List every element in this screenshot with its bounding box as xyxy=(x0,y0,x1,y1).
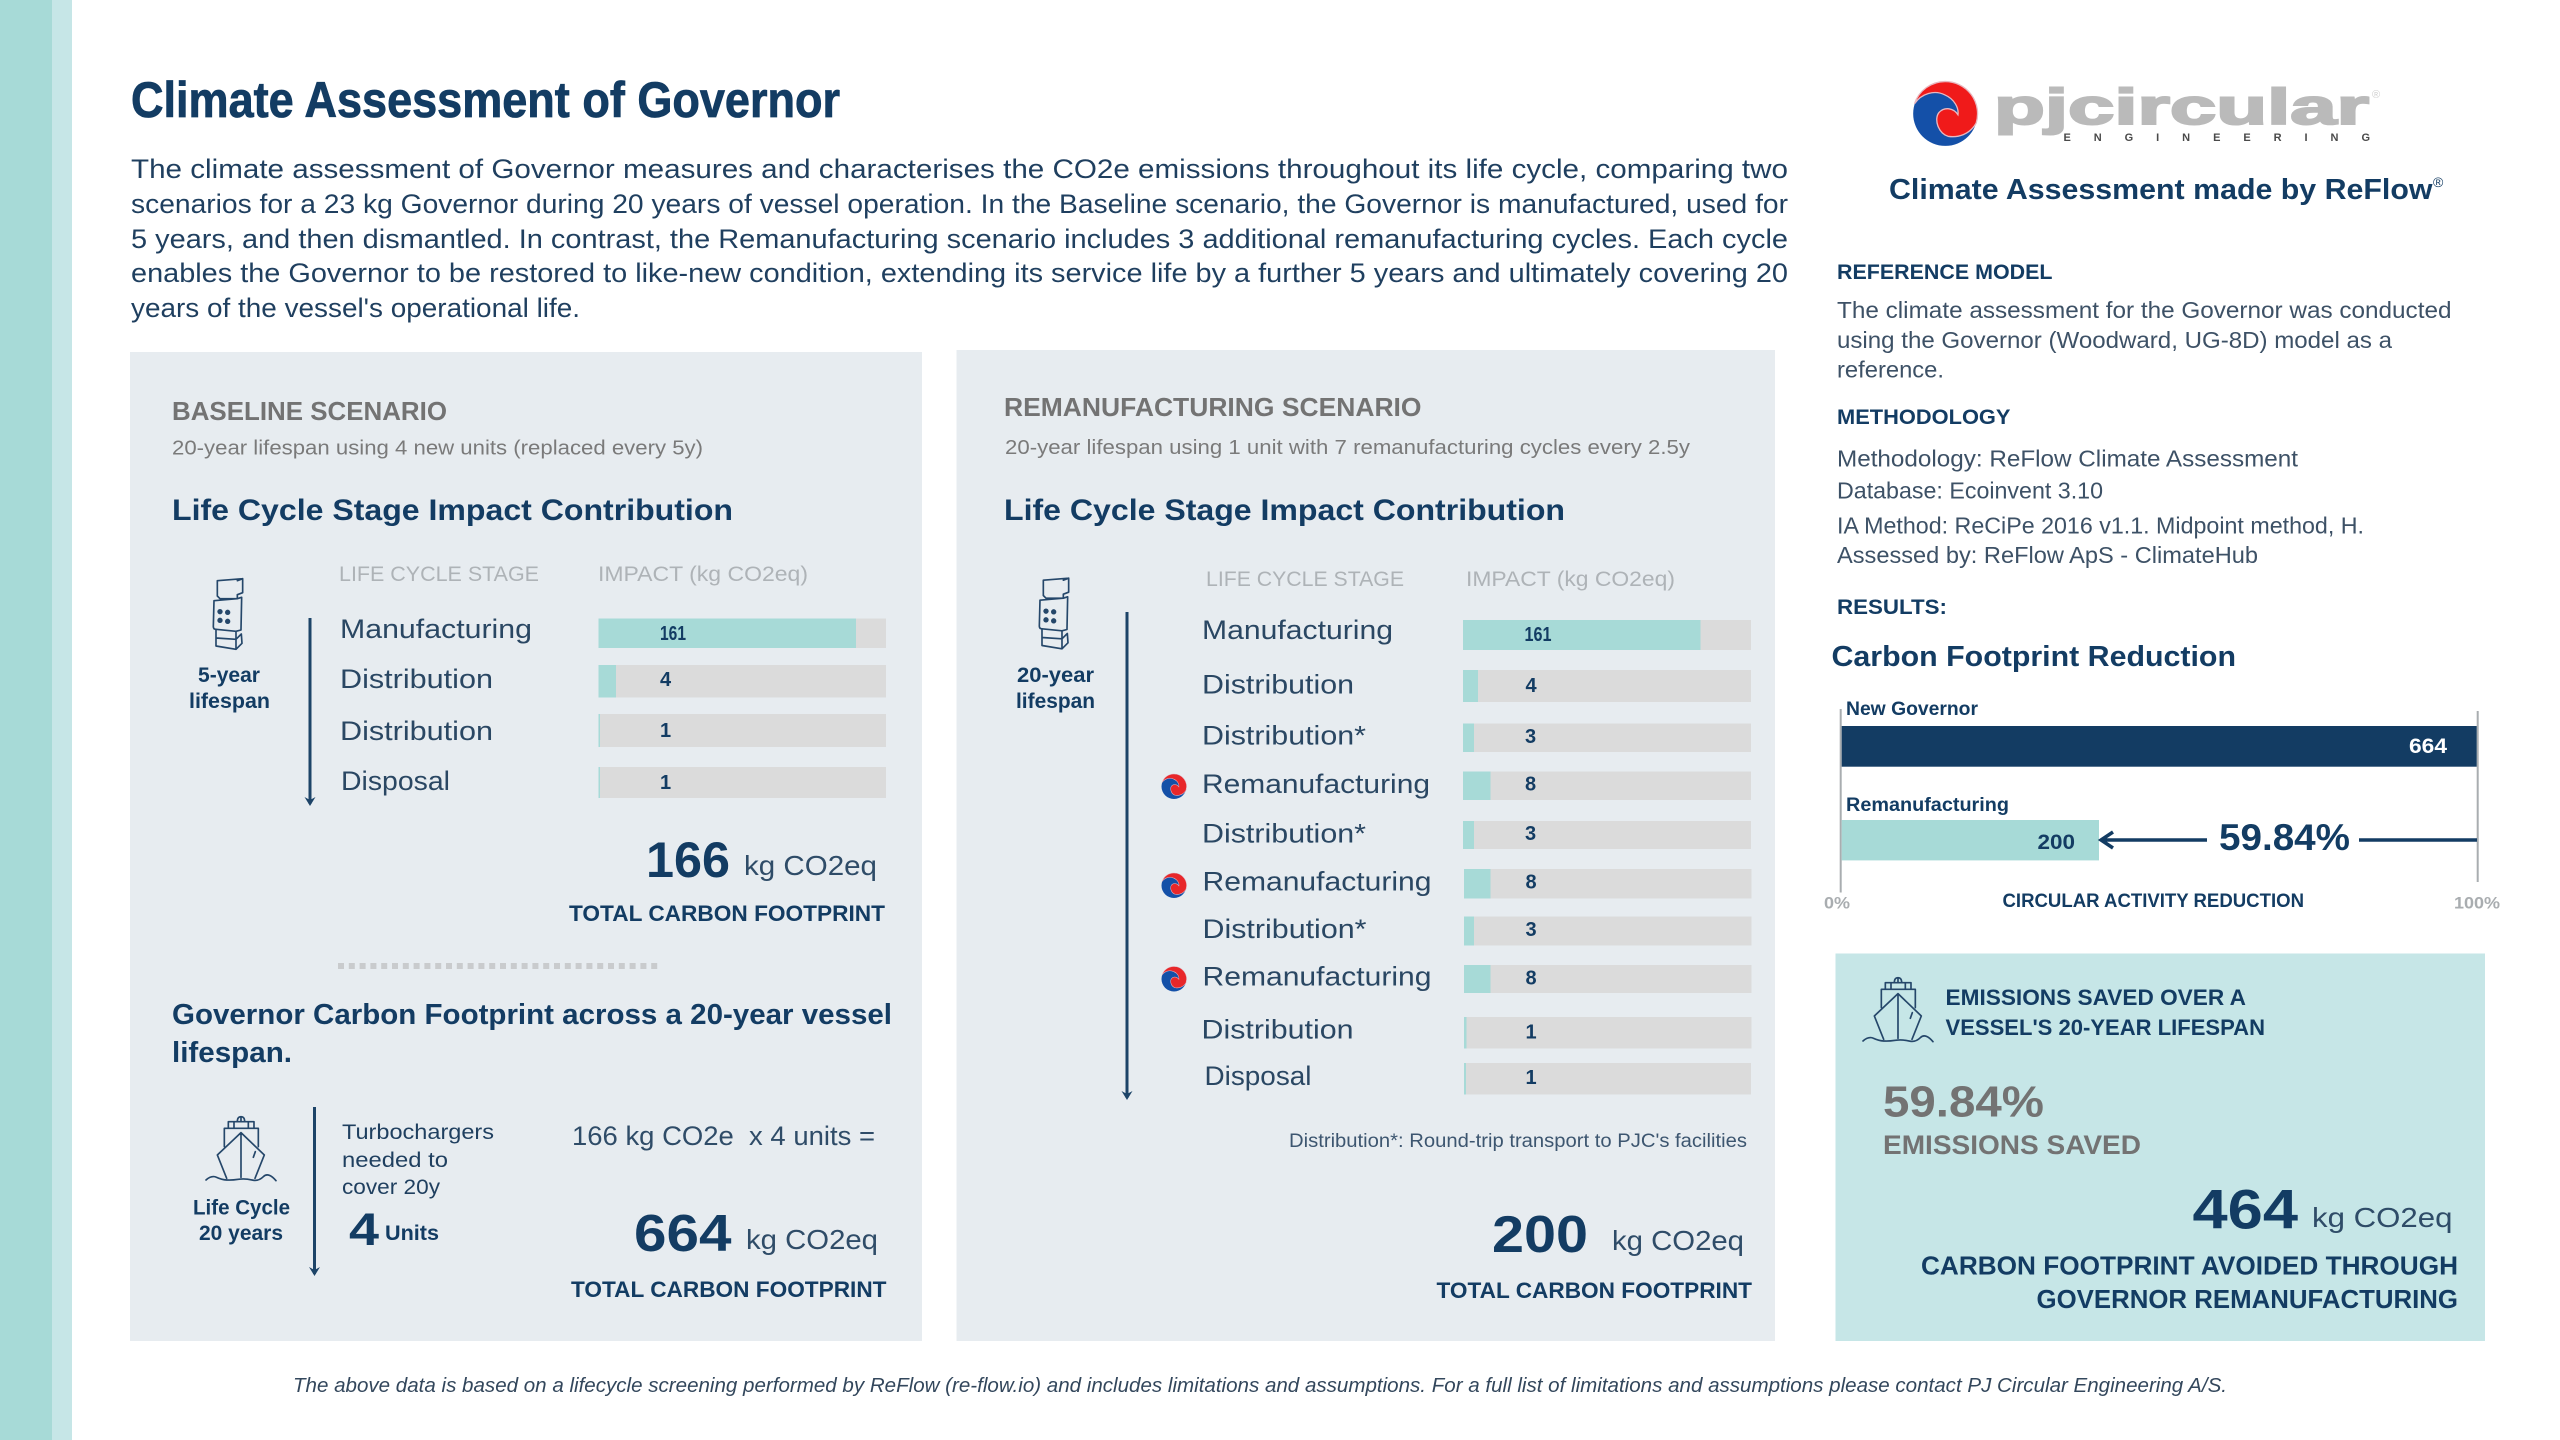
row: distribution 2 xyxy=(340,714,886,747)
bar: remanufacturing xyxy=(1842,820,2099,860)
footer disclaimer: The above data is based on a lifecycle screening performed by ReFlow (re-flow.io) and includes limitations and assumptions. For a full list of limitations and assumptions please contact PJ Circular Engineering A/S. xyxy=(293,1374,2227,1397)
row: distribution star 3: Distribution* xyxy=(1202,914,1366,944)
intro paragraph: enables the Governor to be restored to like-new condition, extending its service life by a further 5 years and ultimately covering 20 xyxy=(131,258,1788,288)
turbochargers text xyxy=(342,1120,494,1199)
panel: baseline scenario xyxy=(130,352,922,1341)
icon: governor xyxy=(213,579,243,649)
20-year total: 664 xyxy=(634,1205,732,1263)
remanufacturing total: kg CO2eq xyxy=(1612,1225,1744,1256)
row: remanufacturing 3: Remanufacturing xyxy=(1202,962,1432,992)
intro paragraph: 5 years, and then dismantled. In contrast, the Remanufacturing scenario includes 3 additional remanufacturing cycles. Each cycle xyxy=(131,224,1788,254)
life cycle label: Life Cycle xyxy=(193,1196,290,1220)
row: distribution 2: Distribution xyxy=(340,716,493,746)
reference model text: The climate assessment for the Governor was conducted xyxy=(1837,297,2452,323)
percent saved xyxy=(1883,1078,2141,1160)
row: remanufacturing 1 xyxy=(1162,769,1751,800)
intro paragraph: scenarios for a 23 kg Governor during 20 years of vessel operation. In the Baseline scenario, the Governor is manufactured, used for xyxy=(131,189,1788,219)
logo: pj circular engineering: ® xyxy=(2372,89,2380,101)
row: manufacturing: 161 xyxy=(660,623,686,645)
reference model text xyxy=(1837,297,2452,382)
bar: new governor: 664 xyxy=(2409,735,2447,758)
row: disposal xyxy=(1204,1061,1751,1094)
row: disposal: Disposal xyxy=(1204,1061,1312,1091)
arrow: life cycle direction xyxy=(304,618,316,806)
row: disposal: Disposal xyxy=(341,766,450,796)
avoided caption: CARBON FOOTPRINT AVOIDED THROUGH xyxy=(1921,1250,2458,1280)
emissions saved heading xyxy=(1946,985,2265,1040)
panel: remanufacturing scenario xyxy=(956,350,1775,1341)
units count: Units xyxy=(385,1222,439,1245)
row: distribution: Distribution xyxy=(340,664,493,694)
icon: governor xyxy=(1039,578,1069,649)
bar: new governor xyxy=(1842,726,2477,767)
turbochargers text: Turbochargers xyxy=(342,1120,494,1144)
row: manufacturing xyxy=(340,614,886,648)
logo: pj circular engineering: ENGINEERING xyxy=(2064,132,2370,144)
lifespan label xyxy=(1016,664,1095,713)
footnote: Distribution*: Round-trip transport to PJC's facilities xyxy=(1289,1131,1747,1152)
life cycle stage heading: Life Cycle Stage Impact Contribution xyxy=(1004,494,1565,527)
row: remanufacturing 3 xyxy=(1162,962,1752,993)
methodology heading: METHODOLOGY xyxy=(1837,406,2010,429)
row: distribution xyxy=(1202,1014,1752,1048)
row: distribution star 2 xyxy=(1202,818,1751,849)
axis labels: 100% xyxy=(2454,894,2500,912)
lifespan label: lifespan xyxy=(1016,690,1095,713)
remanufacturing heading: REMANUFACTURING SCENARIO xyxy=(1004,392,1422,422)
subtitle: made by reflow: ® xyxy=(2433,174,2444,190)
lifespan label xyxy=(189,664,270,713)
lifespan label: lifespan xyxy=(189,690,270,713)
intro paragraph: years of the vessel's operational life. xyxy=(131,293,580,323)
total label: TOTAL CARBON FOOTPRINT xyxy=(1436,1278,1753,1303)
row: distribution 2: 1 xyxy=(660,720,671,742)
carbon footprint reduction heading: Carbon Footprint Reduction xyxy=(1832,641,2236,673)
row: distribution star 3: 3 xyxy=(1526,919,1537,941)
panel: emissions saved xyxy=(1836,954,2485,1341)
row: distribution: Distribution xyxy=(1202,1014,1354,1044)
baseline subheading: 20-year lifespan using 4 new units (replaced every 5y) xyxy=(172,436,703,460)
reference model heading: REFERENCE MODEL xyxy=(1837,261,2053,284)
intro paragraph xyxy=(131,154,1788,323)
row: distribution: 4 xyxy=(660,669,672,691)
row: distribution star 3 xyxy=(1202,914,1752,946)
table header: stage: LIFE CYCLE STAGE xyxy=(339,563,539,586)
footprint heading xyxy=(172,999,892,1069)
turbochargers text: needed to xyxy=(342,1148,448,1172)
logo: pj circular engineering xyxy=(1913,79,2380,146)
life cycle label: 20 years xyxy=(199,1222,283,1245)
avoided caption xyxy=(1921,1250,2458,1314)
multiplication: 166 kg CO2e x 4 units = xyxy=(572,1121,875,1151)
methodology text: Assessed by: ReFlow ApS - ClimateHub xyxy=(1837,542,2258,568)
table header: impact: IMPACT (kg CO2eq) xyxy=(1466,568,1675,591)
icon: ship xyxy=(1863,978,1933,1042)
lifespan label: 20-year xyxy=(1017,664,1094,687)
row: distribution star 2: Distribution* xyxy=(1202,818,1366,848)
remanufacturing total: 200 xyxy=(1492,1206,1588,1264)
row: manufacturing xyxy=(1202,615,1751,650)
reference model text: reference. xyxy=(1837,356,1944,382)
reference model text: using the Governor (Woodward, UG-8D) model as a xyxy=(1837,327,2392,353)
remanufacturing total xyxy=(1492,1206,1744,1264)
left decorative sidebar xyxy=(0,0,72,1440)
methodology text: Methodology: ReFlow Climate Assessment xyxy=(1837,446,2299,472)
avoided caption: GOVERNOR REMANUFACTURING xyxy=(2036,1284,2458,1314)
life cycle label xyxy=(193,1196,290,1245)
row: distribution xyxy=(340,664,886,698)
arrow: reduction xyxy=(2101,817,2477,858)
title: Climate Assessment of Governor xyxy=(131,72,840,128)
row: distribution star 1 xyxy=(1202,720,1751,752)
amount avoided: kg CO2eq xyxy=(2312,1202,2452,1233)
20-year total: kg CO2eq xyxy=(746,1224,878,1255)
baseline unit total xyxy=(646,832,877,888)
row: distribution: 4 xyxy=(1526,675,1538,697)
row: manufacturing: Manufacturing xyxy=(340,614,532,644)
baseline heading: BASELINE SCENARIO xyxy=(172,396,447,426)
row: disposal: 1 xyxy=(1526,1067,1537,1089)
row: remanufacturing 1: Remanufacturing xyxy=(1202,769,1430,799)
percent saved: 59.84% xyxy=(1883,1078,2044,1126)
logo: pj circular engineering: pjcircular xyxy=(1994,79,2369,135)
baseline unit total: kg CO2eq xyxy=(744,850,877,881)
table header: stage: LIFE CYCLE STAGE xyxy=(1206,568,1404,591)
units count xyxy=(349,1204,439,1255)
lifespan label: 5-year xyxy=(198,664,260,687)
row: distribution star 1: 3 xyxy=(1525,726,1536,748)
results heading: RESULTS: xyxy=(1837,596,1947,619)
icon: ship xyxy=(206,1117,276,1181)
units count: 4 xyxy=(349,1204,379,1255)
total label: TOTAL CARBON FOOTPRINT xyxy=(571,1277,887,1302)
label: new governor: New Governor xyxy=(1846,699,1979,720)
row: distribution: 1 xyxy=(1526,1022,1537,1044)
row: distribution star 1: Distribution* xyxy=(1202,720,1366,750)
row: remanufacturing 3: 8 xyxy=(1526,968,1537,990)
emissions saved heading: VESSEL'S 20-YEAR LIFESPAN xyxy=(1946,1015,2265,1040)
percent saved: EMISSIONS SAVED xyxy=(1883,1130,2141,1160)
turbochargers text: cover 20y xyxy=(342,1175,440,1199)
life cycle stage heading: Life Cycle Stage Impact Contribution xyxy=(172,494,733,527)
row: distribution star 2: 3 xyxy=(1525,823,1536,845)
footprint heading: Governor Carbon Footprint across a 20-year vessel xyxy=(172,999,892,1031)
row: disposal xyxy=(341,766,886,798)
row: distribution xyxy=(1202,670,1751,702)
row: remanufacturing 2: Remanufacturing xyxy=(1202,866,1432,896)
arrow: life cycle direction xyxy=(1122,612,1132,1100)
emissions saved heading: EMISSIONS SAVED OVER A xyxy=(1946,985,2246,1010)
row: manufacturing: 161 xyxy=(1524,624,1552,646)
row: remanufacturing 1: 8 xyxy=(1525,774,1536,796)
methodology text: Database: Ecoinvent 3.10 xyxy=(1837,478,2103,504)
table header: impact: IMPACT (kg CO2eq) xyxy=(598,563,808,586)
row: manufacturing: Manufacturing xyxy=(1202,615,1393,645)
axis labels: CIRCULAR ACTIVITY REDUCTION xyxy=(2002,891,2304,912)
bar: remanufacturing: 200 xyxy=(2038,831,2075,854)
row: disposal: 1 xyxy=(660,772,671,794)
intro paragraph: The climate assessment of Governor measures and characterises the CO2e emissions throughout its life cycle, comparing two xyxy=(131,154,1788,184)
axis labels: 0% xyxy=(1824,894,1850,912)
row: remanufacturing 2: 8 xyxy=(1526,872,1537,894)
subtitle: made by reflow: Climate Assessment made by ReFlow xyxy=(1889,174,2433,206)
20-year total xyxy=(634,1205,878,1263)
remanufacturing subheading: 20-year lifespan using 1 unit with 7 remanufacturing cycles every 2.5y xyxy=(1005,436,1691,459)
methodology text xyxy=(1837,446,2364,568)
chart: carbon footprint reduction xyxy=(1824,699,2500,912)
row: remanufacturing 2 xyxy=(1162,866,1752,898)
baseline unit total: 166 xyxy=(646,832,730,888)
axis labels xyxy=(1824,891,2500,912)
total label: TOTAL CARBON FOOTPRINT xyxy=(569,901,886,926)
arrow: 20 years xyxy=(309,1107,320,1276)
amount avoided: 464 xyxy=(2192,1178,2298,1240)
label: remanufacturing: Remanufacturing xyxy=(1846,795,2009,816)
methodology text: IA Method: ReCiPe 2016 v1.1. Midpoint method, H. xyxy=(1837,512,2364,538)
row: distribution: Distribution xyxy=(1202,670,1354,700)
amount avoided xyxy=(2192,1178,2452,1240)
arrow: reduction: 59.84% xyxy=(2219,817,2350,858)
footprint heading: lifespan. xyxy=(172,1037,292,1069)
